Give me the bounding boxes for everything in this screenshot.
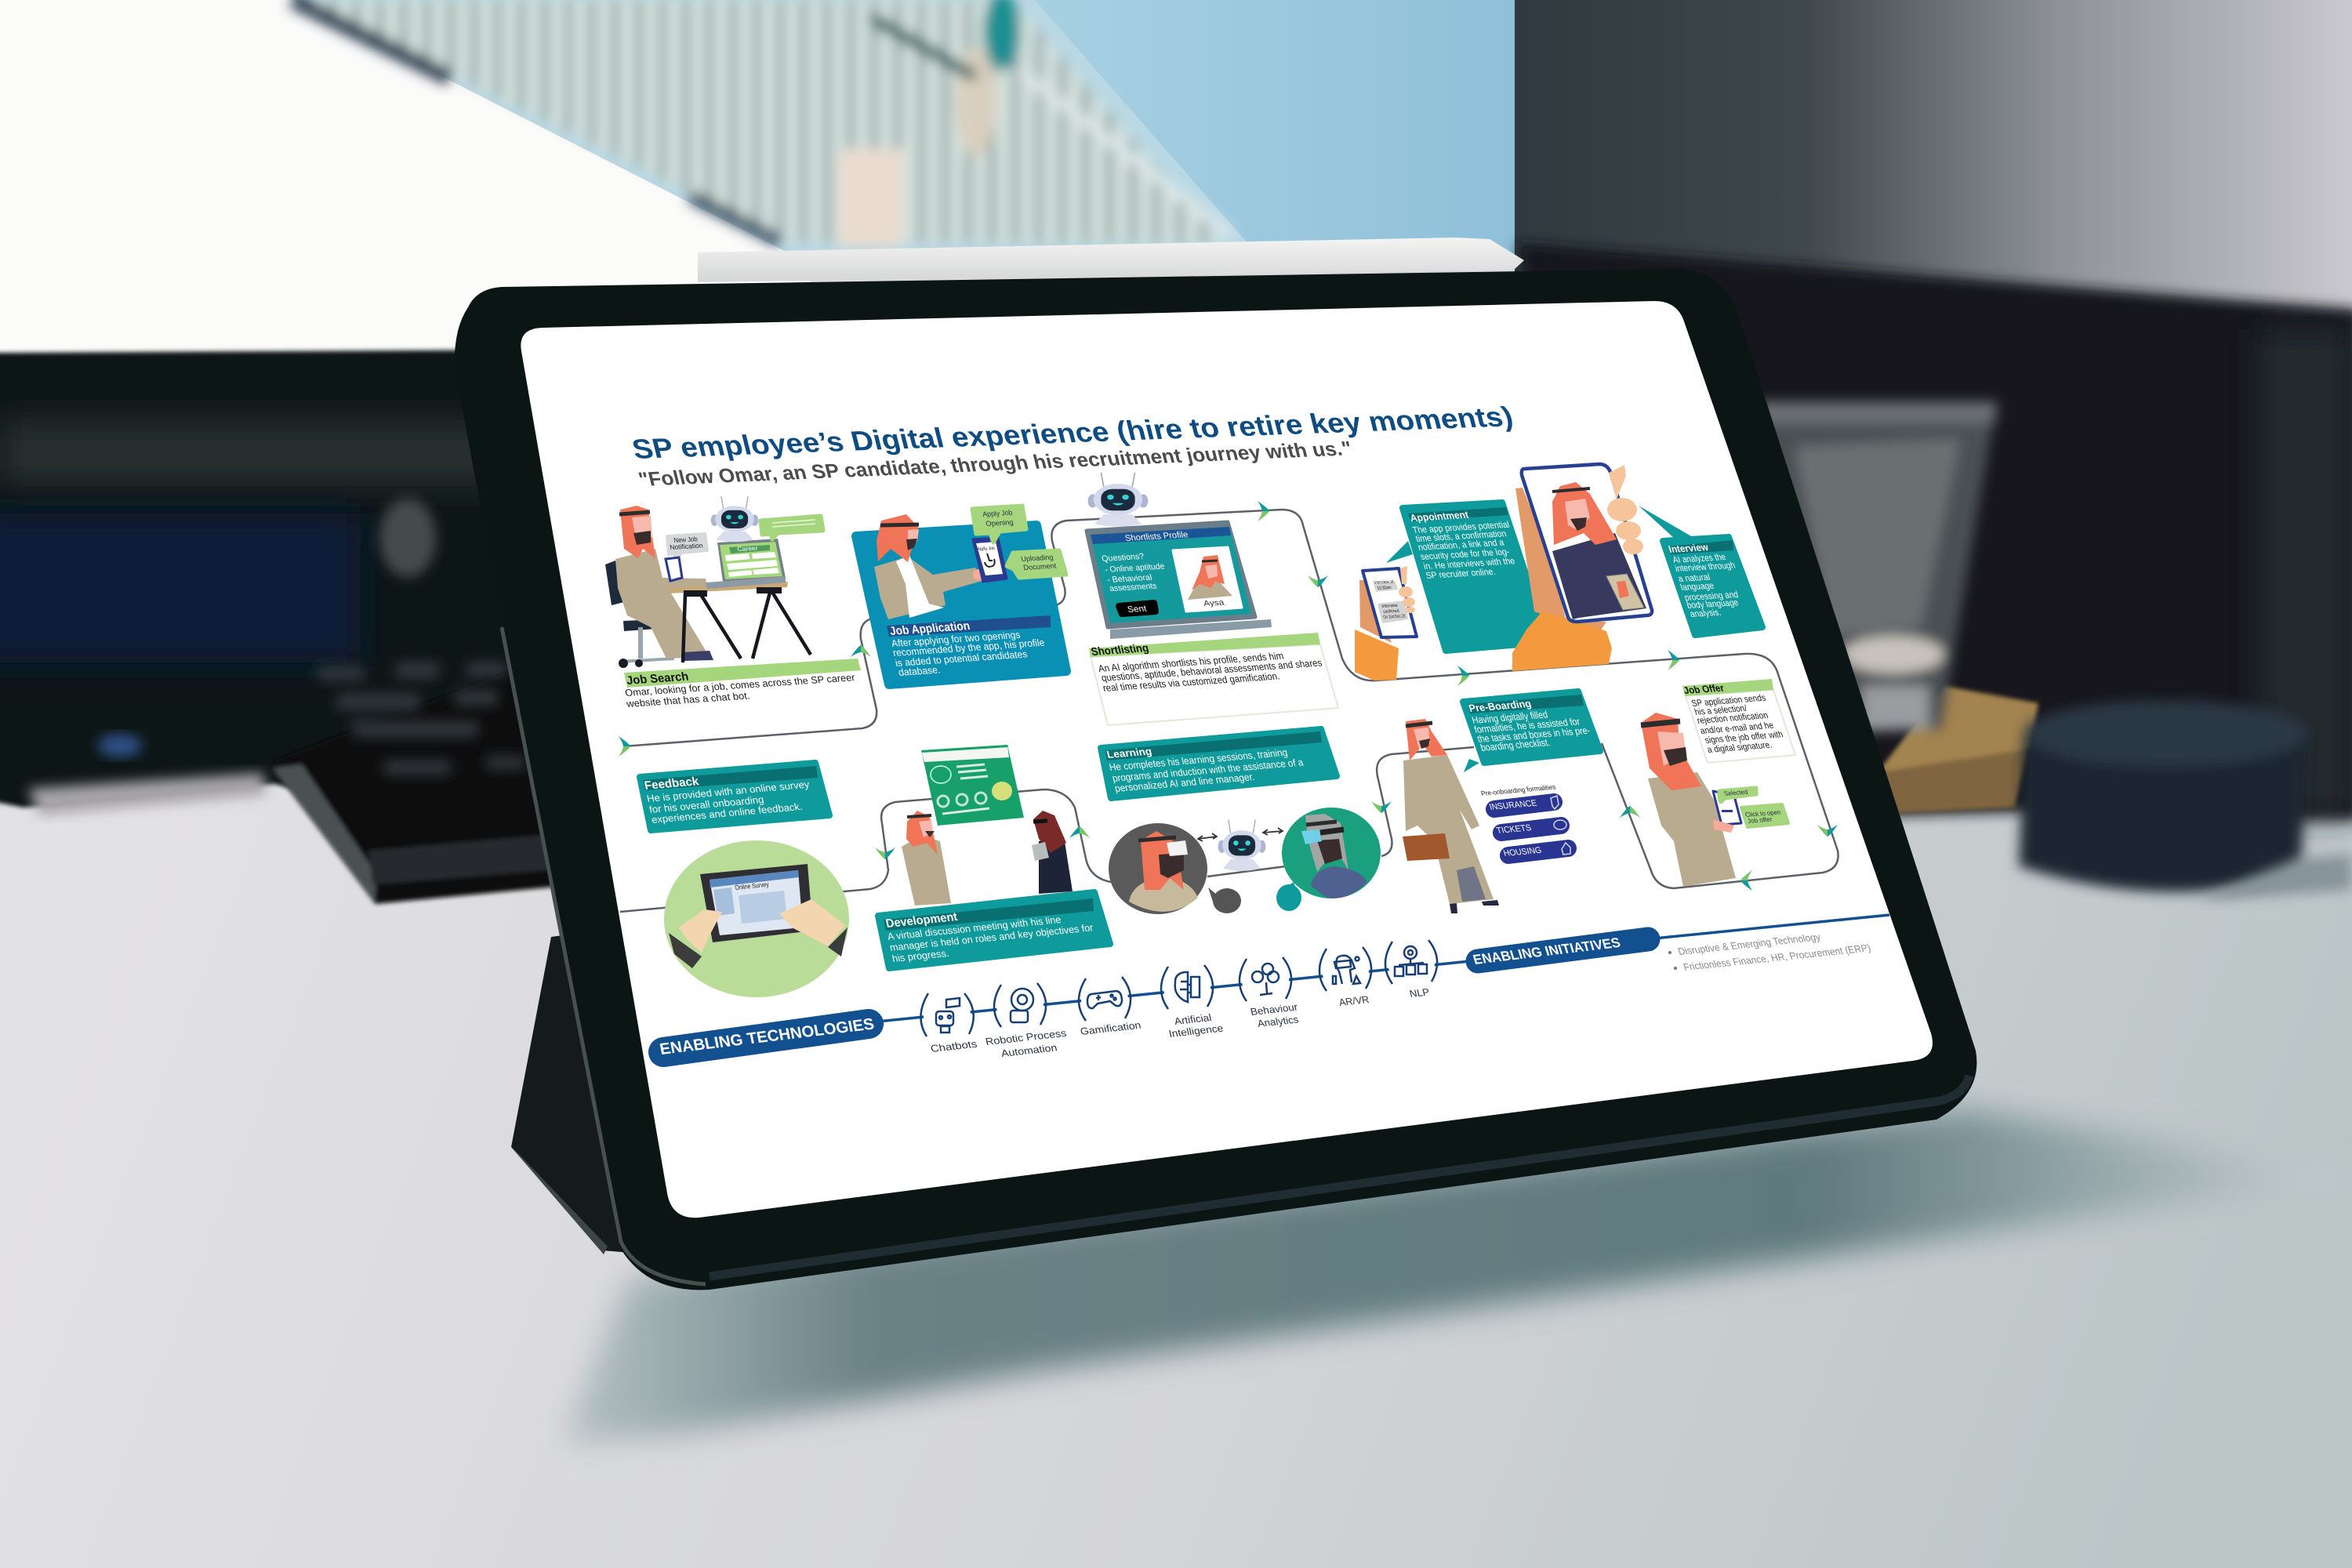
label: artificial intelligence [1168,1012,1225,1040]
phone apply screen [973,538,1007,582]
tablet edge highlight [502,627,706,1284]
left palm [1359,580,1392,643]
job offer card: his a selection/ [1693,702,1749,717]
VR man circle [1109,823,1207,914]
appointment panel: The app provides potential [1411,520,1511,535]
feedback panel: Feedback [643,775,700,793]
woman with tablet [1032,811,1073,894]
tablet cast shadow on desk [562,1109,2352,1444]
click to open bubble: Click to open [1744,809,1782,818]
left small phone: Interview at [1374,579,1395,586]
icon: behaviour analytics [1240,957,1291,1001]
photo background: monitor foot strip [28,773,267,815]
phone apply screen: Apply Job [977,546,996,552]
bubble: apply job opening: Opening [985,518,1014,528]
direction arrows [619,501,1838,891]
scene: shortlisting [1087,473,1338,725]
timeline line [870,915,1889,1022]
icon: chatbots [920,993,974,1036]
initiatives list: Disruptive & Emerging Technology [1676,931,1822,957]
initiatives list: Frictionless Finance, HR, Procurement (ERP) [1682,942,1872,973]
initiatives list [1668,931,1872,973]
photo background: glass tumbler [1757,401,1997,733]
pre-boarding panel: boarding checklist. [1479,736,1552,753]
photo background: dark monitor right [1517,243,2352,823]
survey tablet: Online Survey [735,880,770,891]
photo background: bright wall [0,0,862,368]
pre-boarding panel: Pre-Boarding [1467,698,1533,714]
feedback panel [640,763,829,830]
photo background: wooden coaster [1878,686,2038,814]
scene: feedback [640,763,849,997]
bubble: apply job opening: Apply Job [982,509,1013,518]
left small phone: 10:30am [1377,585,1392,591]
learning panel: personalized AI and line manager. [1113,771,1256,794]
chat bubble [760,516,823,539]
left small phone: Interview [1381,603,1399,609]
dashboard [921,745,1024,826]
laptop screen: Shortlists Profile [1124,530,1189,543]
feedback panel: experiences and online feedback. [651,801,804,826]
blue panel [856,525,1066,684]
bubble: apply job opening [972,506,1026,543]
appointment panel [1386,503,1548,651]
label: AR/VR: AR/VR [1338,994,1370,1008]
cuffs [669,927,848,968]
label: behaviour analytics: Analytics [1257,1014,1300,1029]
scene: appointment [1355,464,1762,681]
appointment panel: notification, a link and a [1417,538,1505,553]
process connector line [620,510,1838,912]
man with arms folded [902,811,951,906]
job application label: is added to potential candidates [895,648,1029,669]
job application label [887,615,1051,678]
label: behaviour analytics [1250,1001,1300,1029]
laptop screen [1091,527,1251,623]
bubble: uploading document: Uploading [1020,554,1054,563]
interview panel: analysis. [1689,607,1722,619]
photo background: grey wall top right [1515,0,2352,329]
interview panel: processing and [1683,589,1740,603]
photo background: sky blue screen [784,0,1517,267]
laptop screen: - Online aptitude [1104,562,1166,575]
left small phone [1363,568,1417,637]
appointment panel: SP recruiter online. [1425,567,1497,581]
robot [1218,820,1265,871]
laptop career page [706,539,786,589]
small phone fingers [1399,566,1415,613]
formalities list [1480,783,1570,858]
learning panel [1101,729,1337,798]
tablet cover lower band [710,1076,1969,1276]
sent button: Sent [1127,604,1149,615]
job search label: website that has a chat bot. [625,690,751,710]
photo background: blue LED [98,734,142,757]
pre-boarding panel: formalities, he is assisted for [1472,716,1581,735]
interview panel: body language [1686,597,1740,611]
photo background: dim blue screen [0,514,361,662]
job offer card: a digital signature. [1705,739,1773,755]
laptop career page: Career [737,545,759,553]
photo background: railing [292,0,1231,247]
laptop screen: assessments [1109,582,1158,593]
survey tablet [700,864,813,942]
icon: robotic process automation [994,983,1046,1027]
click to open bubble: Job offer [1747,816,1773,825]
label: chatbots: Chatbots [930,1039,978,1054]
job offer card: SP application sends [1690,692,1767,709]
VR man circle two [1282,808,1381,898]
pre-boarding panel: Having digitally filled [1470,709,1549,726]
label: artificial intelligence: Artificial [1174,1012,1213,1027]
profile card: Aysa [1203,599,1225,608]
job application label: After applying for two openings [891,630,1022,649]
job offer card: rejection notification [1695,710,1769,726]
job application label: database. [898,664,942,678]
icon: gamification [1079,977,1131,1021]
appointment panel: in. He interviews with the [1422,556,1516,572]
label: artificial intelligence: Intelligence [1168,1023,1225,1040]
scene: pre-boarding [1403,691,1600,913]
photo background: pale bulb [379,499,436,577]
photo background: dark cylinder object [2019,700,2307,892]
tablet body [455,269,1976,1290]
interview panel: interview through [1674,560,1737,574]
briefcase [1403,833,1450,861]
interview panel [1639,506,1762,635]
formalities list: INSURANCE [1488,799,1538,812]
big hand palm [1515,488,1606,633]
interview panel: language [1679,580,1715,593]
enabling initiatives pill: ENABLING INITIATIVES [1471,935,1622,967]
scene: development [878,745,1110,968]
tablet screen [521,301,1933,1218]
development panel [878,892,1110,968]
job offer card: and/or e-mail and he [1698,720,1775,736]
robot [711,496,758,542]
label: behaviour analytics: Behaviour [1250,1001,1299,1018]
appointment panel: time slots, a confirmation [1414,528,1508,544]
label: NLP: NLP [1409,986,1431,1000]
icon: AR/VR [1319,947,1371,991]
icon: NLP [1385,940,1437,984]
shortlisting label: An AI algorithm shortlists his profile, sends him [1097,651,1285,674]
apple pencil [698,238,1524,282]
label: gamification: Gamification [1080,1020,1142,1037]
shortlisting label: Shortlisting [1090,642,1150,659]
photo background: dark grey band [0,419,502,486]
arrow left [1198,833,1217,841]
enabling technologies pill: ENABLING TECHNOLOGIES [659,1015,876,1058]
scene: job offer [1641,679,1795,887]
photo background: dark monitor left [0,350,596,862]
appointment panel: Appointment [1409,509,1471,524]
big phone with video call [1522,464,1652,622]
grey speech bubble [1208,887,1241,913]
label: robotic process automation: Robotic Process [985,1028,1068,1047]
laptop frame [1087,522,1255,627]
job offer card: signs the job offer with [1703,728,1784,746]
notification bubble: Notification [669,542,704,551]
interview panel: Interview [1667,541,1710,555]
development panel: manager is held on roles and key objectives for [889,922,1094,953]
green circle [664,840,849,997]
job offer card [1682,679,1795,763]
job search label: Job Search [626,670,690,688]
robot [1088,473,1148,527]
selected bubble: Selected [1723,789,1749,797]
photo background: blue sky left wedge [292,0,1254,251]
job search label [624,659,861,710]
profile card [1173,547,1242,612]
development panel: his progress. [891,948,950,964]
left forearm [1355,630,1399,681]
arrow right [1263,828,1283,835]
teal speech bubble [1276,882,1301,911]
job offer phone [1713,791,1741,833]
left small phone: confirmed [1383,608,1400,615]
job application label: recommended by the app, his profile [892,637,1046,659]
sent button [1119,603,1156,615]
photo background: dark side column right [2258,329,2352,815]
enabling technologies band [659,915,1889,1059]
click to open bubble [1741,804,1788,827]
desk [668,582,811,662]
big hand sleeve [1512,612,1612,671]
shortlisting label: questions, aptitude, behavioral assessments and shares [1100,658,1323,684]
interview panel: AI analyzes the [1671,551,1727,565]
learning panel: He completes his learning sessions, training [1108,746,1289,773]
subtitle: "Follow Omar, an SP candidate, through his recruitment journey with us." [637,437,1354,491]
bubble: uploading document [1007,550,1066,578]
photo background: cylinder shadow [2195,855,2352,902]
development panel: Development [884,910,959,931]
notification bubble: New Job [673,535,699,544]
label: robotic process automation [985,1028,1068,1059]
chair [605,561,674,668]
formalities list: TICKETS [1495,823,1533,836]
bubble: uploading document: Document [1022,562,1058,572]
standing man with briefcase [1403,719,1499,913]
laptop screen: - Behavioral [1106,573,1153,585]
phone [666,557,682,581]
photo background: keyboard [272,651,564,904]
man with phone [874,514,985,619]
man with phone [1641,713,1736,887]
shortlisting label: real time results via customized gamification. [1102,670,1281,694]
label: robotic process automation: Automation [1000,1042,1058,1059]
scene: learning [1101,729,1381,914]
left small phone: On 2nd Dec 20 [1383,613,1406,620]
title: SP employee’s Digital experience (hire to retire key moments) [629,401,1516,465]
hands [679,899,845,953]
notification bubble [667,534,707,558]
icon: artificial intelligence [1161,965,1213,1009]
laptop base [1110,619,1272,639]
big hand fingers [1607,465,1643,554]
formalities list: HOUSING [1502,846,1543,858]
laptop screen: Questions? [1101,552,1145,564]
man at desk [615,506,713,661]
pre-boarding panel: the tasks and boxes in his pre- [1475,724,1592,745]
learning panel: Learning [1105,746,1153,760]
selected bubble [1719,788,1756,802]
feedback panel: He is provided with an online survey [646,779,811,804]
shortlisting label [1089,633,1338,725]
tablet stand cover [511,933,651,1254]
job search label: Omar, looking for a job, comes across the SP career [624,672,856,699]
development panel: A virtual discussion meeting with his line [887,914,1062,942]
feedback panel: for his overall onboarding [648,794,765,815]
job offer card: Job Offer [1682,682,1726,696]
learning panel: programs and induction with the assistance of a [1111,756,1305,784]
formalities list: Pre-onboarding formalities [1480,783,1557,797]
interview panel: a natural [1677,572,1711,584]
appointment panel: security code for the log- [1419,546,1511,562]
job application label: Job Application [888,619,971,638]
scene: job application [856,506,1066,684]
scene: job search [605,496,861,710]
infographic slide [605,401,1889,1059]
pre-boarding panel [1463,691,1600,772]
